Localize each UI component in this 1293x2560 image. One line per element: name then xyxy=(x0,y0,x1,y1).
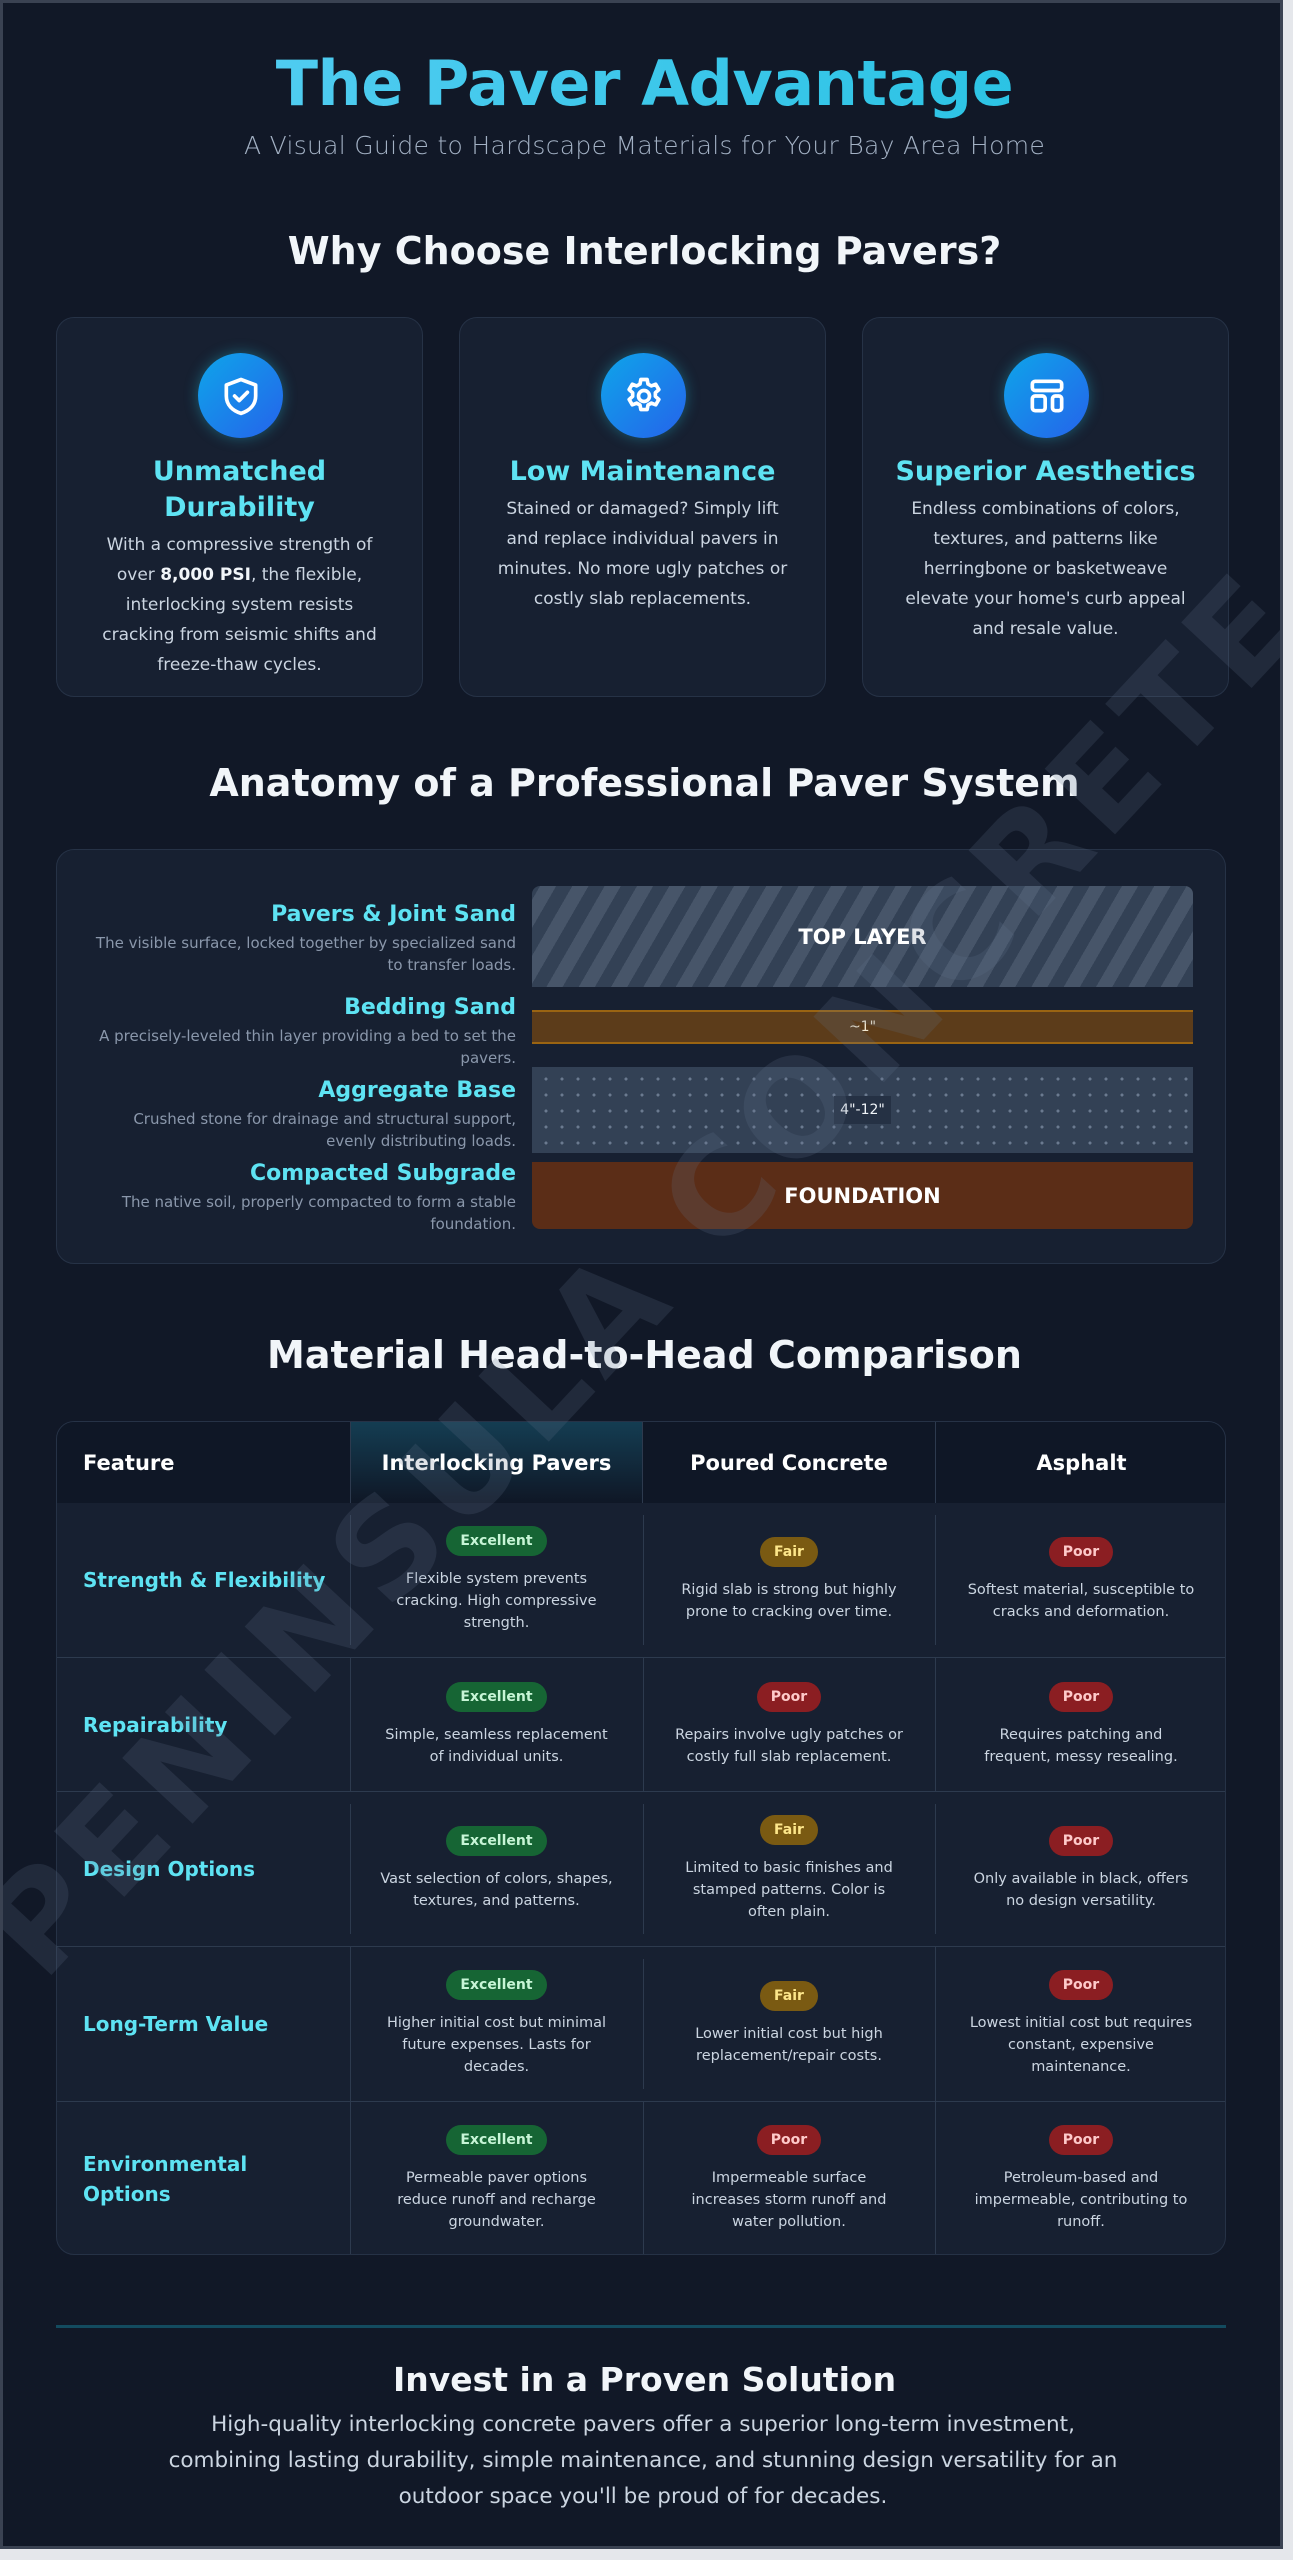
panel: durability card xyxy=(56,317,423,697)
row: repairability: Poor xyxy=(1063,1688,1099,1704)
layer: aggregate xyxy=(532,1067,1193,1153)
table header: Feature xyxy=(83,1450,174,1474)
row: design: Only available in black, offers no design versatility. xyxy=(974,1871,1188,1909)
card title: Durability xyxy=(164,492,315,523)
row: strength: Poor xyxy=(1063,1544,1099,1560)
label: pavers xyxy=(96,902,516,974)
card text: With a compressive strength of over 8,000 PSI, the flexible, interlocking system resists cracking from seismic shifts and freeze-thaw cycles. xyxy=(102,535,377,675)
row: value: Lower initial cost but high replacement/repair costs. xyxy=(695,2026,883,2064)
row: design: Fair xyxy=(774,1822,804,1838)
layer: bedding sand: ~1" xyxy=(849,1019,876,1035)
icon: shield xyxy=(198,353,283,438)
label: subgrade xyxy=(122,1161,516,1233)
row: design xyxy=(57,1791,1227,1946)
row: design: Limited to basic finishes and stamped patterns. Color is often plain. xyxy=(685,1860,893,1920)
title xyxy=(3,47,1286,120)
row: environment: Poor xyxy=(1063,2132,1099,2148)
layer: foundation xyxy=(532,1162,1193,1229)
row: strength: Strength & Flexibility xyxy=(83,1568,325,1592)
table header: Interlocking Pavers xyxy=(382,1450,611,1474)
row: repairability: Simple, seamless replacement of individual units. xyxy=(385,1726,608,1764)
label: aggregate: Crushed stone for drainage and structural support, evenly distributing loads. xyxy=(133,1110,516,1150)
layer: top layer xyxy=(532,886,1193,987)
row: environment xyxy=(57,2101,1227,2256)
card title xyxy=(153,456,326,523)
layer: aggregate: 4"-12" xyxy=(840,1102,885,1118)
row: strength: Flexible system prevents cracking. High compressive strength. xyxy=(396,1571,597,1631)
layer labels xyxy=(96,902,516,1233)
row: value: Fair xyxy=(774,1988,804,2004)
heading: comparison: Material Head-to-Head Comparison xyxy=(267,1333,1022,1377)
icon: layout xyxy=(1004,353,1089,438)
card title: Superior Aesthetics xyxy=(895,456,1196,487)
card text: Endless combinations of colors, textures, and patterns like herringbone or basketweave elevate your home's curb appeal and resale value. xyxy=(905,499,1186,639)
card title: Low Maintenance xyxy=(510,456,775,487)
row: repairability: Excellent xyxy=(460,1688,533,1704)
row: design: Design Options xyxy=(83,1857,255,1881)
label: pavers: The visible surface, locked together by specialized sand to transfer loads. xyxy=(96,934,516,974)
row: strength: Rigid slab is strong but highly prone to cracking over time. xyxy=(681,1582,897,1620)
row: value xyxy=(57,1946,1227,2101)
panel: maintenance card xyxy=(459,317,826,697)
layer: top layer: TOP LAYER xyxy=(798,924,927,948)
comparison table xyxy=(56,1421,1226,2255)
label: bedding: Bedding Sand xyxy=(344,995,516,1020)
label: bedding xyxy=(99,995,516,1067)
row: design: Excellent xyxy=(460,1833,533,1849)
heading: invest: Invest in a Proven Solution xyxy=(393,2360,896,2399)
row: repairability: Repairability xyxy=(83,1712,227,1736)
row: value: Poor xyxy=(1063,1977,1099,1993)
row: environment: Permeable paver options reduce runoff and recharge groundwater. xyxy=(397,2170,596,2230)
icon: gear xyxy=(601,353,686,438)
row: environment: Impermeable surface increases storm runoff and water pollution. xyxy=(692,2170,886,2230)
table header: Poured Concrete xyxy=(690,1450,888,1474)
row: repairability: Requires patching and frequent, messy resealing. xyxy=(984,1726,1178,1764)
layer: bedding sand xyxy=(532,1010,1193,1044)
label: pavers: Pavers & Joint Sand xyxy=(271,902,516,927)
row: strength: Softest material, susceptible to cracks and deformation. xyxy=(968,1582,1194,1620)
panel: anatomy xyxy=(56,849,1226,1264)
subtitle: A Visual Guide to Hardscape Materials for Your Bay Area Home xyxy=(244,131,1045,160)
label: subgrade: The native soil, properly compacted to form a stable foundation. xyxy=(122,1193,516,1233)
row: repairability: Poor xyxy=(771,1688,807,1704)
row: environment: Environmental xyxy=(83,2152,247,2176)
row: value: Long-Term Value xyxy=(83,2012,268,2036)
heading: why choose: Why Choose Interlocking Pavers? xyxy=(288,229,1001,273)
row: strength xyxy=(83,1515,1194,1645)
row: environment: Options xyxy=(83,2182,171,2206)
layer: foundation: FOUNDATION xyxy=(784,1184,941,1208)
label: subgrade: Compacted Subgrade xyxy=(250,1161,516,1186)
row: value: Lowest initial cost but requires constant, expensive maintenance. xyxy=(970,2015,1192,2075)
row: value: Higher initial cost but minimal future expenses. Lasts for decades. xyxy=(387,2015,606,2075)
row: design: Vast selection of colors, shapes, textures, and patterns. xyxy=(380,1871,613,1909)
label: aggregate xyxy=(133,1078,516,1150)
card text: Stained or damaged? Simply lift and replace individual pavers in minutes. No more ugly patches or costly slab replacements. xyxy=(498,499,787,609)
row: design: Poor xyxy=(1063,1833,1099,1849)
label: aggregate: Aggregate Base xyxy=(318,1078,516,1103)
closing paragraph: High-quality interlocking concrete pavers offer a superior long-term investment, combining lasting durability, simple maintenance, and stunning design versatility for an outdoor space you'll be proud of for decades. xyxy=(169,2412,1117,2509)
card title: Unmatched xyxy=(153,456,326,487)
row: value: Excellent xyxy=(460,1977,533,1993)
table header xyxy=(57,1422,1227,1503)
table header: Asphalt xyxy=(1036,1450,1127,1474)
row: environment: Poor xyxy=(771,2132,807,2148)
row: strength: Fair xyxy=(774,1544,804,1560)
row: repairability xyxy=(57,1657,1227,1791)
row: environment: Excellent xyxy=(460,2132,533,2148)
row: environment: Petroleum-based and impermeable, contributing to runoff. xyxy=(975,2170,1187,2230)
panel: aesthetics card xyxy=(862,317,1229,697)
label: bedding: A precisely-leveled thin layer providing a bed to set the pavers. xyxy=(99,1027,516,1067)
row: repairability: Repairs involve ugly patches or costly full slab replacement. xyxy=(675,1726,903,1764)
row: strength: Excellent xyxy=(460,1533,533,1549)
title: The Paver Advantage xyxy=(276,47,1013,120)
heading: anatomy: Anatomy of a Professional Paver System xyxy=(209,761,1080,805)
